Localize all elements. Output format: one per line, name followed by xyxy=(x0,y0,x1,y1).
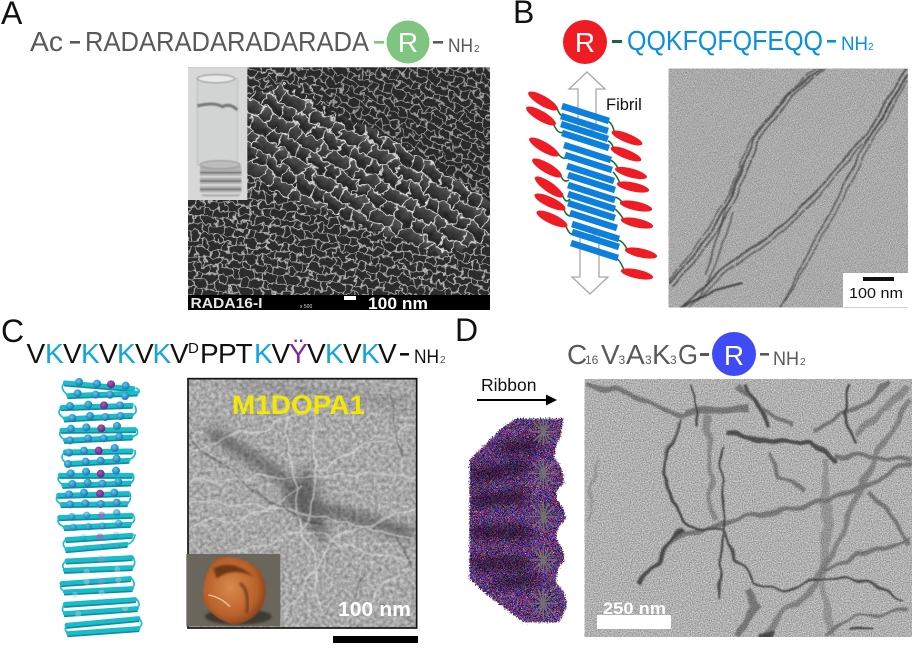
ribbon arrow xyxy=(477,394,557,406)
amide terminus C: 2 xyxy=(440,355,446,366)
TEM micrograph C xyxy=(188,379,417,628)
sequence D: G xyxy=(678,339,698,370)
sequence C: P xyxy=(200,338,219,369)
sequence B: 2 xyxy=(868,42,874,53)
SEM caption bar: 100 nm xyxy=(368,294,428,313)
sequence B: R xyxy=(575,27,595,58)
amide terminus C xyxy=(400,347,446,368)
panel A xyxy=(1,0,507,313)
sequence B: QQKFQFQFEQQ xyxy=(627,25,823,56)
sequence C: T xyxy=(236,338,253,369)
sequence B: NH xyxy=(841,34,868,55)
ribbon molecular model xyxy=(467,417,570,625)
scale bar D xyxy=(597,615,671,629)
sequence C: V xyxy=(307,338,326,369)
sequence C: K xyxy=(81,338,100,369)
beta-sheet stack model xyxy=(56,378,142,636)
sequence C: K xyxy=(325,338,344,369)
sequence A: RADARADARADARADA xyxy=(85,26,369,57)
sequence C: V xyxy=(99,338,118,369)
sequence C: K xyxy=(254,338,273,369)
sequence C: V xyxy=(343,338,362,369)
ribbon label: Ribbon xyxy=(481,375,536,395)
SEM caption bar xyxy=(188,294,490,313)
scale box B: 100 nm xyxy=(849,286,903,302)
sequence D: C xyxy=(567,339,587,370)
M1DOPA1 title: M1DOPA1 xyxy=(232,390,365,420)
sequence A xyxy=(30,20,480,64)
TEM micrograph B xyxy=(669,69,908,307)
sequence C: Ÿ xyxy=(289,338,308,369)
sequence C: K xyxy=(45,338,64,369)
vial photo inset xyxy=(188,67,247,200)
TEM micrograph D xyxy=(585,379,912,637)
sequence C: D xyxy=(188,340,199,357)
sequence D xyxy=(567,332,806,376)
sequence D: 2 xyxy=(800,357,806,368)
sequence D: 3 xyxy=(645,353,652,367)
sequence D: 3 xyxy=(618,353,626,367)
scale box B xyxy=(843,273,908,307)
sequence A: Ac xyxy=(30,26,63,57)
fibril label: Fibril xyxy=(606,96,642,114)
sequence C: V xyxy=(135,338,154,369)
sequence C: V xyxy=(26,338,46,369)
panel B xyxy=(513,0,908,307)
sequence D: A xyxy=(626,339,645,370)
gel photo inset xyxy=(186,554,280,626)
SEM micrograph xyxy=(188,67,490,295)
panel D xyxy=(455,312,912,637)
label C: C xyxy=(1,313,24,349)
sequence C: K xyxy=(361,338,380,369)
scale bar C xyxy=(333,636,418,643)
sequence C: V xyxy=(378,338,397,369)
sequence C: K xyxy=(117,338,136,369)
sequence D: R xyxy=(724,340,744,371)
sequence A: NH xyxy=(448,36,473,57)
sequence A: R xyxy=(398,27,418,58)
sequence C: V xyxy=(170,338,189,369)
sequence D: K xyxy=(652,339,671,370)
sequence C: K xyxy=(152,338,172,369)
scale label C: 100 nm xyxy=(338,599,411,621)
sequence C: V xyxy=(63,338,82,369)
sequence D: 3 xyxy=(670,353,677,367)
sequence A: 2 xyxy=(474,44,480,55)
sequence D: 16 xyxy=(585,353,599,367)
SEM caption bar: x 500 xyxy=(300,304,312,310)
sequence C: V xyxy=(272,338,290,369)
SEM caption bar: RADA16-I xyxy=(190,296,262,312)
amide terminus C: NH xyxy=(414,347,439,368)
diagram: fibril arrow xyxy=(569,72,608,294)
sequence D: NH xyxy=(773,349,799,370)
diagram: linkers xyxy=(553,108,627,270)
sequence D: V xyxy=(601,339,620,370)
sequence B xyxy=(563,20,874,64)
panel C xyxy=(1,313,446,643)
diagram: red heads xyxy=(524,88,658,282)
sequence C: P xyxy=(218,338,237,369)
scale label D: 250 nm xyxy=(603,599,666,618)
diagram: blue bars xyxy=(561,106,619,258)
label D: D xyxy=(455,312,478,348)
